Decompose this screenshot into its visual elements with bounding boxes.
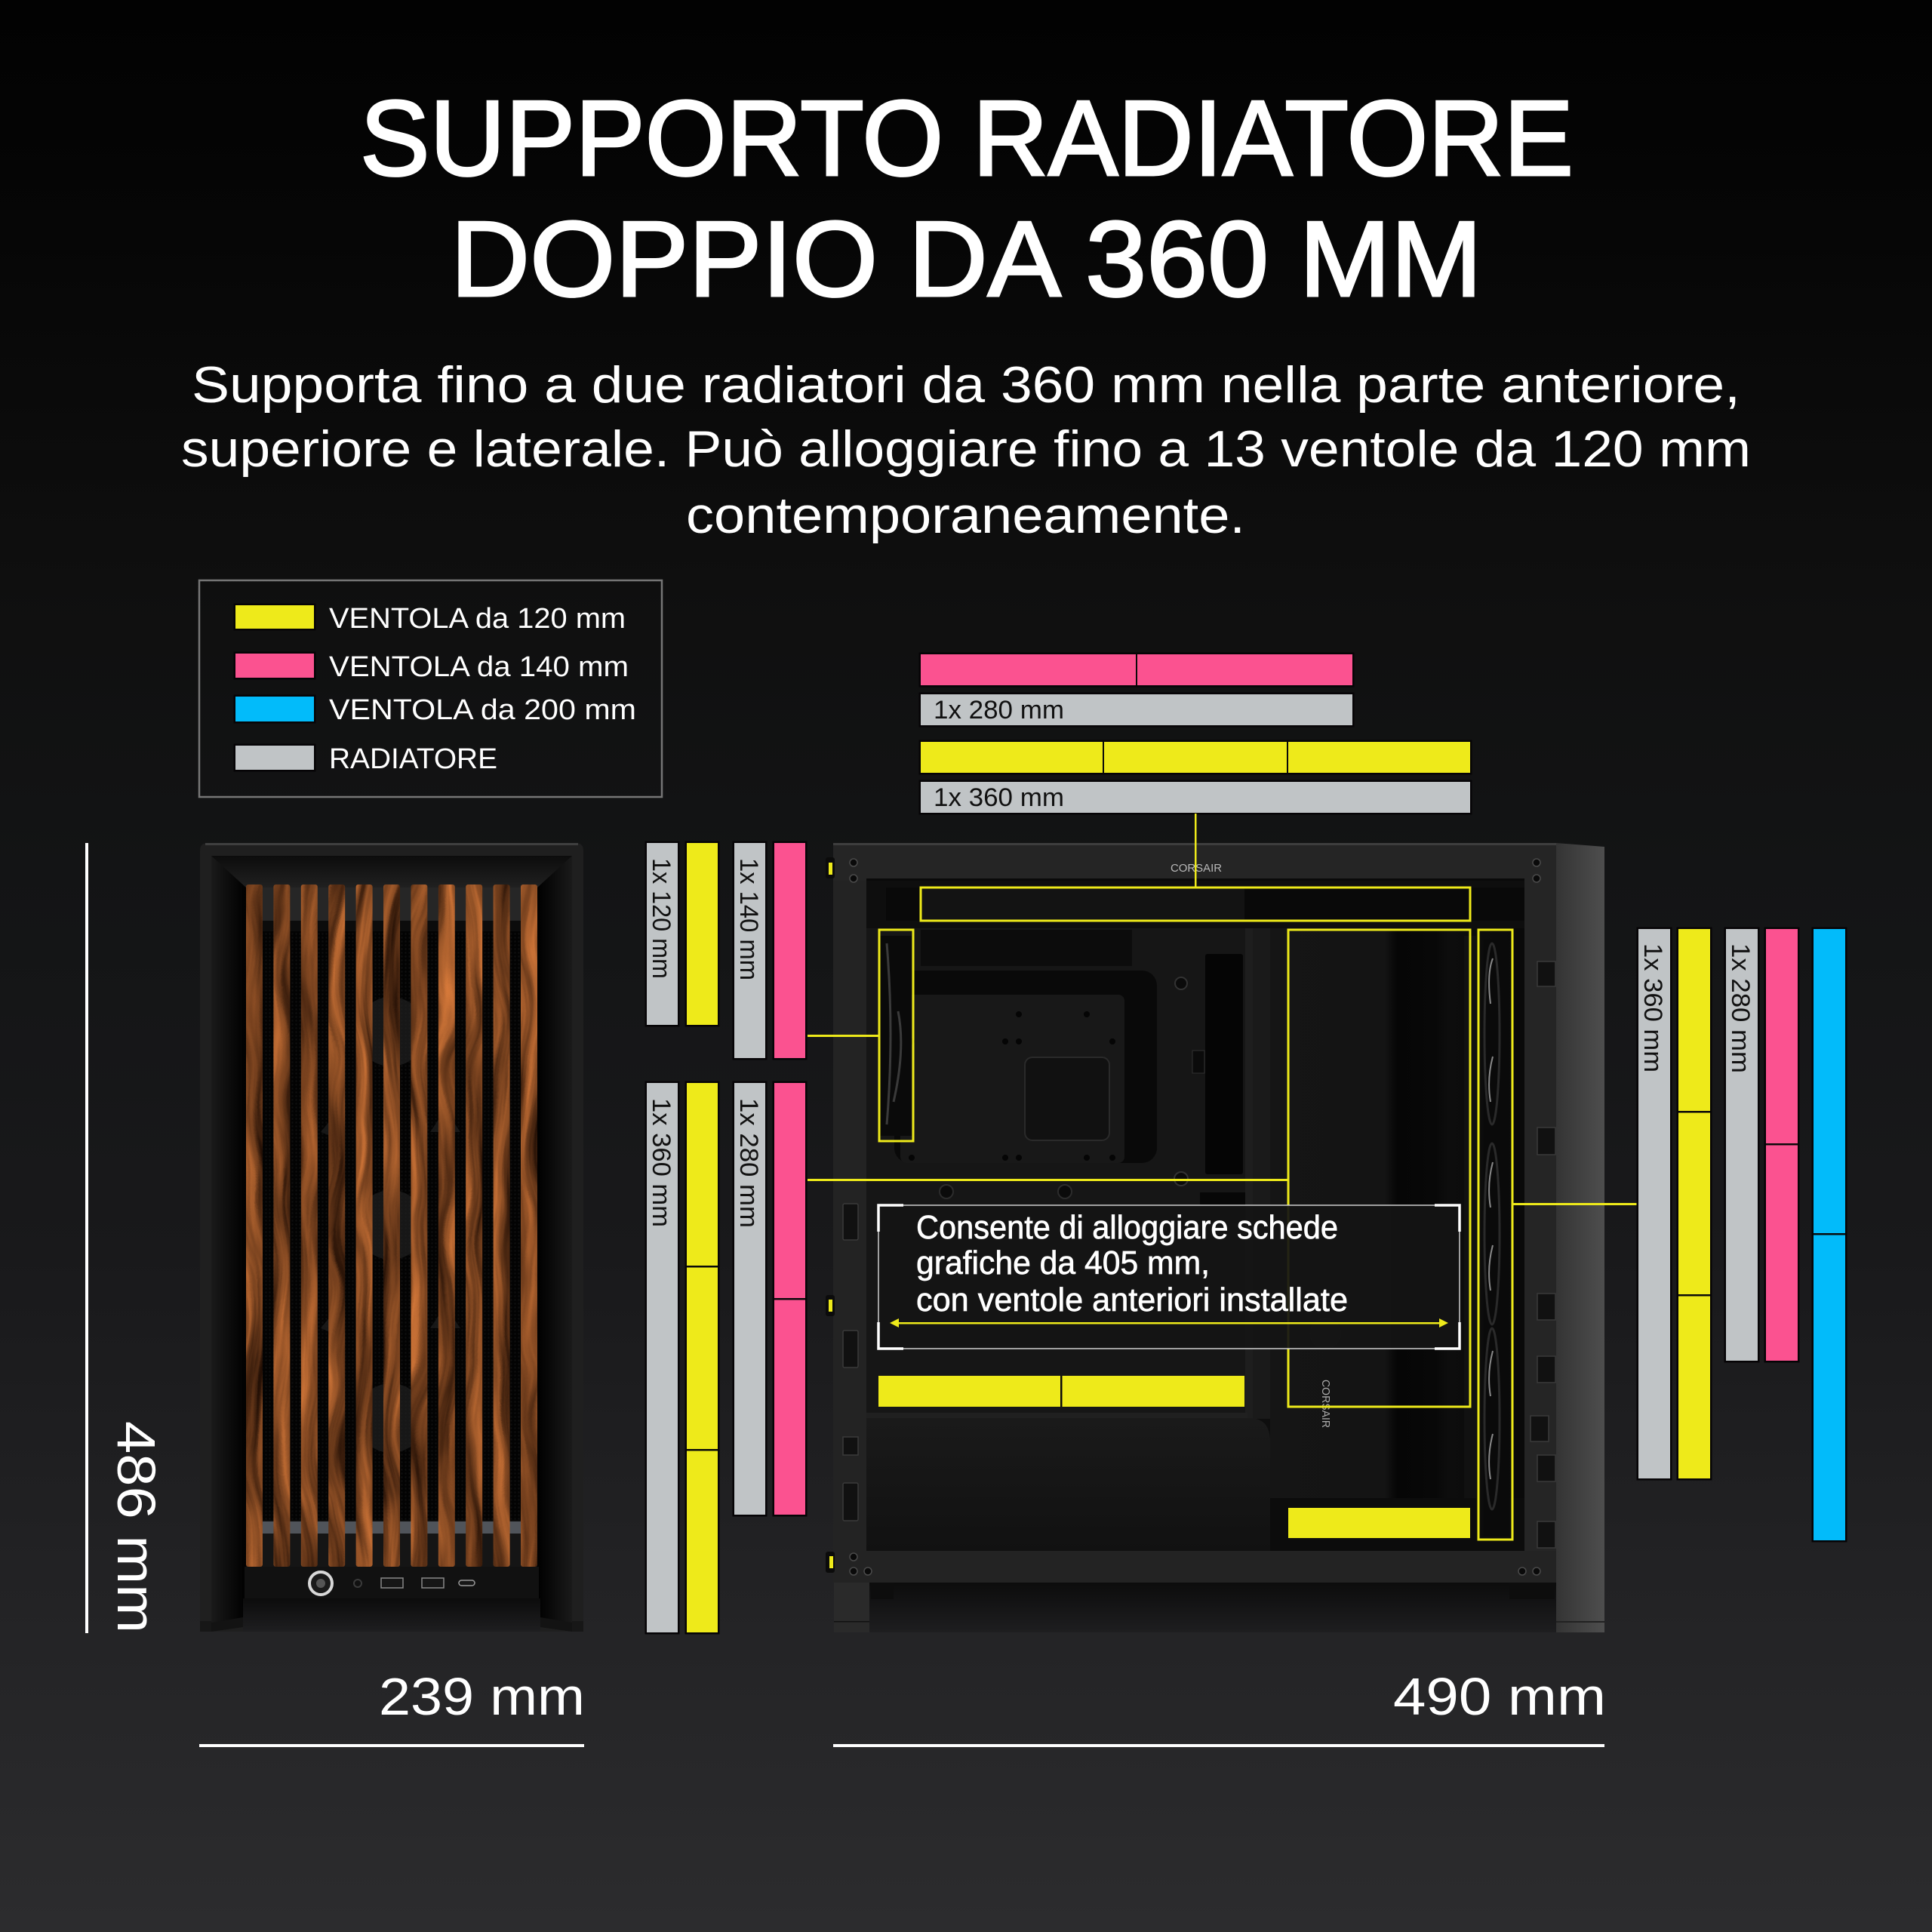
subtitle text: Supporta fino a due radiatori da 360 mm nella parte anteriore, (192, 356, 1740, 414)
top bars: 140 mm fans and 280 mm radiator (921, 654, 1352, 725)
rear fan inside the case (880, 936, 912, 1136)
outline: side mount (1288, 930, 1470, 1407)
filled bar: bottom fans (878, 1376, 1244, 1407)
arrow: 405 mm span (890, 1318, 1448, 1327)
side view of the case (826, 843, 1604, 1632)
title: DOPPIO DA 360 MM (451, 199, 1482, 319)
dimension: height 486 mm (85, 843, 165, 1633)
dimension: width 239 mm (199, 1667, 585, 1747)
vertical bars: right 360 mm: 1x 360 mm (1638, 943, 1667, 1072)
vertical bars: lower left 280 mm: 1x 280 mm (734, 1098, 763, 1228)
subtitle text (181, 356, 1751, 544)
vertical bars: upper left 120 mm: 1x 120 mm (647, 858, 675, 979)
motherboard tray (866, 928, 1253, 1419)
title (360, 78, 1574, 319)
vertical bar: right 200 mm fans (1814, 929, 1845, 1540)
front I/O panel (245, 1567, 539, 1598)
dimension: width 239 mm: 239 mm (379, 1667, 585, 1726)
vertical bars: upper left 140 mm (734, 843, 805, 1058)
front mesh (261, 931, 522, 1520)
dimension: width 490 mm (833, 1667, 1606, 1747)
outline: front mount (1478, 930, 1512, 1540)
power supply shroud (866, 1418, 1270, 1551)
vertical bars: lower left 280 mm (734, 1083, 805, 1515)
outline: top mount (921, 888, 1470, 921)
vertical bars: upper left 120 mm (647, 843, 718, 1025)
legend item: 200 mm fan: VENTOLA da 200 mm (329, 694, 636, 726)
callout: graphics card length: Consente di alloggiare schede (916, 1209, 1338, 1246)
top bars: 120 mm fans and 360 mm radiator: 1x 360 mm (934, 783, 1064, 812)
subtitle text: contemporaneamente. (686, 487, 1245, 544)
vertical bars: lower left 360 mm: 1x 360 mm (647, 1098, 675, 1227)
vertical bars: upper left 140 mm: 1x 140 mm (734, 858, 763, 980)
filled bar: rear bottom fan (1288, 1508, 1470, 1538)
vertical bars: right 280 mm: 1x 280 mm (1726, 943, 1755, 1073)
side post slots (843, 961, 1555, 1548)
panel: legend (199, 580, 662, 797)
top bars: 140 mm fans and 280 mm radiator: 1x 280 mm (934, 696, 1064, 724)
legend item: 120 mm fan: VENTOLA da 120 mm (329, 603, 626, 635)
frame bars and side posts (833, 843, 866, 1583)
wood slats (246, 884, 537, 1567)
title: SUPPORTO RADIATORE (360, 78, 1574, 198)
outline: rear mount (879, 930, 913, 1141)
vertical bars: right 360 mm (1638, 929, 1710, 1478)
small yellow tabs (826, 857, 835, 1573)
right chamber (1270, 928, 1524, 1551)
connector line: rear mount (808, 1035, 878, 1037)
screws (850, 859, 1540, 1575)
legend item: radiator: RADIATORE (329, 743, 497, 775)
front view of the case with wood slats (200, 843, 583, 1632)
legend item: 140 mm fan: VENTOLA da 140 mm (329, 651, 629, 683)
connector line: front mount (1512, 1203, 1637, 1205)
subtitle text: superiore e laterale. Può alloggiare fino a 13 ventole da 120 mm (181, 420, 1751, 478)
connector line: top radiator (1195, 814, 1197, 888)
corsair top logo: CORSAIR (1171, 862, 1222, 875)
fan hubs behind mesh (321, 997, 460, 1453)
floor and feet (243, 1598, 540, 1632)
callout: graphics card length: con ventole anteriori installate (916, 1281, 1348, 1318)
legend item: radiator (235, 743, 497, 775)
callout: graphics card length: grafiche da 405 mm, (916, 1244, 1210, 1281)
top bars: 120 mm fans and 360 mm radiator (921, 742, 1470, 813)
connector line: side mount (808, 1179, 1288, 1181)
top interior rail (886, 888, 1524, 921)
vertical bars: lower left 360 mm (647, 1083, 718, 1632)
vertical bars: right 280 mm (1726, 929, 1798, 1361)
dimension: height 486 mm: 486 mm (106, 1421, 165, 1633)
dimension: width 490 mm: 490 mm (1393, 1667, 1606, 1726)
callout: graphics card length (878, 1205, 1460, 1349)
corsair vertical logo: CORSAIR (1319, 1380, 1332, 1428)
front fans inside the case (1484, 940, 1509, 1536)
